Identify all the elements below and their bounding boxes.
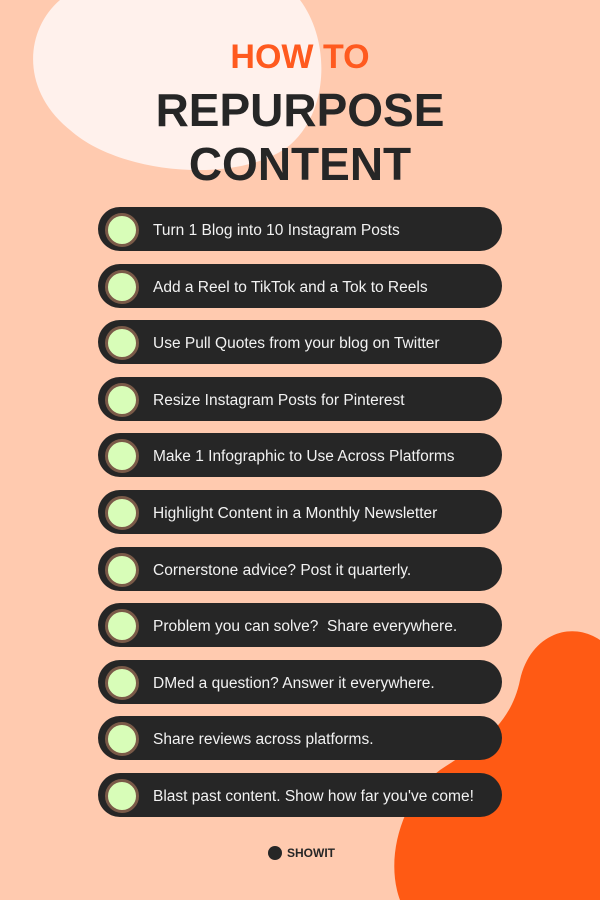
tip 3: Use Pull Quotes from your blog on Twitter	[153, 335, 440, 352]
title: how to: HOW TO	[230, 38, 370, 76]
tip 8: Problem you can solve? Share everywhere.	[153, 618, 457, 635]
tip 2	[98, 264, 502, 308]
title: repurpose content	[156, 84, 444, 190]
tip 1: Turn 1 Blog into 10 Instagram Posts	[153, 222, 400, 239]
tip 6	[98, 490, 502, 534]
blob: orange bottom-right	[394, 631, 600, 900]
tip 8	[98, 603, 502, 647]
tip 7	[98, 547, 502, 591]
tip 9: DMed a question? Answer it everywhere.	[153, 675, 435, 692]
tip 11: Blast past content. Show how far you've come!	[153, 788, 474, 805]
logo: showit: SHOWIT	[287, 846, 335, 860]
title: repurpose content: REPURPOSE	[156, 84, 444, 136]
tip 4	[98, 377, 502, 421]
tip 10	[98, 716, 502, 760]
tip 6: Highlight Content in a Monthly Newsletter	[153, 505, 437, 522]
tip 3	[98, 320, 502, 364]
tip 1	[98, 207, 502, 251]
list of tips	[98, 207, 502, 817]
tip 9	[98, 660, 502, 704]
icon: showit mark	[268, 846, 282, 860]
tip 11	[98, 773, 502, 817]
tip 2: Add a Reel to TikTok and a Tok to Reels	[153, 279, 428, 296]
tip 10: Share reviews across platforms.	[153, 731, 374, 748]
tip 5: Make 1 Infographic to Use Across Platforms	[153, 448, 455, 465]
tip 4: Resize Instagram Posts for Pinterest	[153, 392, 405, 409]
tip 5	[98, 433, 502, 477]
title: repurpose content: CONTENT	[189, 138, 411, 190]
tip 7: Cornerstone advice? Post it quarterly.	[153, 562, 411, 579]
